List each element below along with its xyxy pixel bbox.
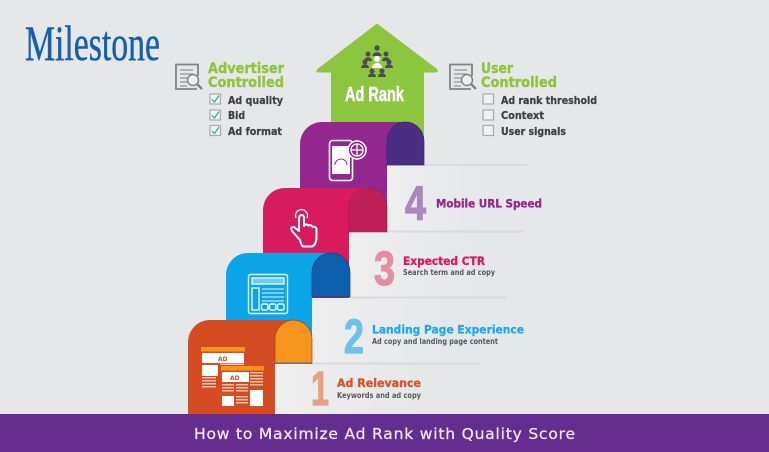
checklist: user factors: Ad rank threshold	[501, 95, 597, 107]
step 3: expected ctr: Search term and ad copy	[403, 268, 495, 277]
heading: advertiser controlled: Advertiser	[208, 61, 284, 77]
step 2 background	[312, 296, 507, 363]
checklist: user factors: Context	[501, 110, 544, 122]
step 4: mobile url speed: 4	[405, 178, 426, 231]
step 2: landing page experience: Ad copy and landing page content	[372, 337, 498, 346]
scroll: step 2 blue	[226, 253, 350, 364]
icon: tapping hand	[291, 210, 316, 246]
step 1 background	[275, 362, 480, 414]
step 2: landing page experience: Landing Page Experience	[372, 322, 524, 336]
checklist: advertiser factors: Bid	[228, 110, 245, 122]
checklist: advertiser factors: Ad format	[228, 126, 282, 138]
scroll: step 4 purple	[300, 122, 424, 232]
heading: advertiser controlled: Controlled	[208, 75, 284, 91]
heading: advertiser controlled	[208, 61, 284, 91]
icon: mobile speed	[330, 140, 366, 180]
step 1: ad relevance: Ad Relevance	[337, 376, 421, 390]
heading: user controlled: Controlled	[481, 75, 557, 91]
step 1: ad relevance: 1	[311, 363, 329, 416]
step 2: landing page experience: 2	[344, 311, 364, 364]
icon: document with magnifier	[450, 64, 476, 89]
scroll: step 1 orange	[188, 320, 312, 414]
checklist: advertiser factors: Ad quality	[228, 95, 283, 107]
step 3: expected ctr	[374, 243, 495, 296]
step 4 background	[387, 164, 527, 231]
icon: ad layouts: AD	[218, 356, 228, 363]
step 1: ad relevance: Keywords and ad copy	[337, 391, 421, 400]
icon: document with magnifier	[176, 64, 202, 89]
icon: ad layouts	[201, 347, 264, 407]
scroll: step 3 red	[263, 188, 387, 298]
step 3 background	[350, 230, 523, 297]
banner title: How to Maximize Ad Rank with Quality Score	[194, 425, 575, 443]
label: ad rank: Ad Rank	[345, 84, 405, 106]
step 4: mobile url speed	[405, 178, 542, 231]
step 1: ad relevance	[311, 363, 421, 416]
logo: Milestone: Milestone	[25, 15, 160, 71]
step 2: landing page experience	[344, 311, 524, 364]
checklist: user factors: User signals	[501, 126, 566, 138]
step 3: expected ctr: Expected CTR	[403, 254, 485, 268]
icon: people network	[361, 45, 393, 77]
icon: ad layouts: AD	[230, 375, 240, 382]
panel: user controlled	[450, 61, 597, 138]
heading: user controlled: User	[481, 61, 513, 77]
checklist: advertiser factors	[210, 94, 283, 138]
step 4: mobile url speed: Mobile URL Speed	[436, 196, 542, 210]
panel: advertiser controlled	[176, 61, 284, 138]
footer banner	[0, 414, 769, 452]
arrow: ad rank	[316, 24, 438, 135]
icon: landing page layout	[248, 274, 288, 314]
checklist: user factors	[483, 94, 597, 138]
step 3: expected ctr: 3	[374, 243, 395, 296]
heading: user controlled	[481, 61, 557, 91]
